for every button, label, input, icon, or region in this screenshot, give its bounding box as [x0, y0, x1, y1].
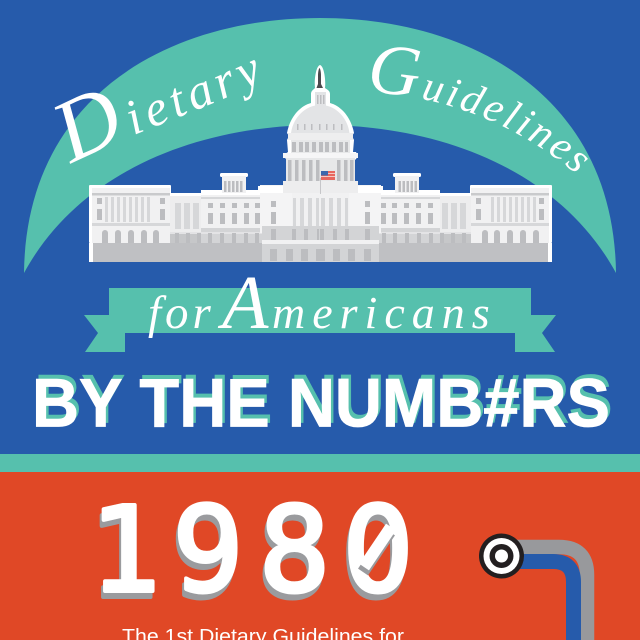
timeline pipe [505, 547, 587, 640]
slashed zero stroke [363, 532, 390, 572]
heading: BY THE NUMB#RS: BY THE NUMB#RS [34, 360, 612, 438]
ribbon: for Americans [84, 261, 556, 352]
background: blue header [0, 0, 640, 456]
divider band [0, 454, 640, 472]
year: 1980: 1980 [90, 481, 414, 619]
pipe blue track [505, 562, 574, 640]
heading: BY THE NUMB#RS: BY THE NUMB#RS [32, 364, 610, 442]
year: 1980: 1980 [88, 487, 412, 625]
panel: 1980 section [0, 472, 640, 640]
ribbon tail right [515, 315, 556, 352]
ribbon fold [109, 288, 531, 333]
ribbon text: for [148, 287, 215, 339]
ribbon text: A [217, 261, 269, 345]
pipe gray track [505, 547, 587, 640]
title word: Guidelines: Guidelines [372, 47, 588, 172]
title: Dietary Guidelines [54, 47, 588, 172]
ribbon text: mericans [272, 287, 497, 338]
ribbon tail left [84, 315, 125, 352]
illustration: US Capitol building [89, 65, 552, 262]
american flag [320, 171, 335, 194]
banner: teal arch [24, 18, 616, 273]
title word: Dietary: Dietary [54, 60, 256, 164]
capitol dome [283, 65, 358, 193]
statue of freedom [316, 68, 323, 88]
icon: timeline target node [479, 534, 524, 578]
